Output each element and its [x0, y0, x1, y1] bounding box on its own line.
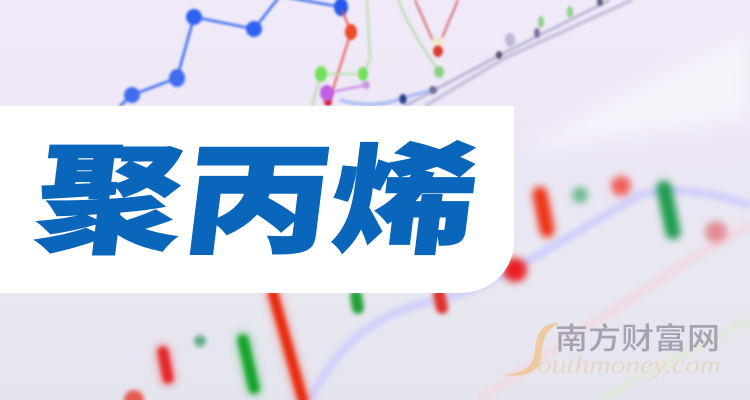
title: 聚 — [28, 105, 194, 278]
line chart: axes band — [405, 0, 632, 106]
background moving average curves — [310, 191, 750, 400]
candlesticks: right — [503, 176, 727, 282]
line chart: red series — [324, 0, 458, 106]
line chart: green series — [312, 0, 444, 106]
logo chinese name: 南方财富网 — [555, 314, 720, 358]
background light corner — [520, 30, 750, 150]
line chart: purple series — [320, 81, 370, 101]
line chart: dark blue markers — [340, 0, 603, 104]
title: 烯 — [322, 105, 488, 278]
white title panel — [0, 106, 514, 293]
title — [28, 105, 488, 278]
logo url: outhmoney.com — [537, 352, 721, 379]
watermark logo — [502, 314, 721, 379]
logo swoosh — [502, 323, 560, 376]
title: 丙 — [176, 105, 342, 278]
line chart: blue series — [120, 0, 348, 106]
candlesticks: lower halos — [163, 290, 304, 400]
candlesticks: lower — [124, 290, 442, 400]
